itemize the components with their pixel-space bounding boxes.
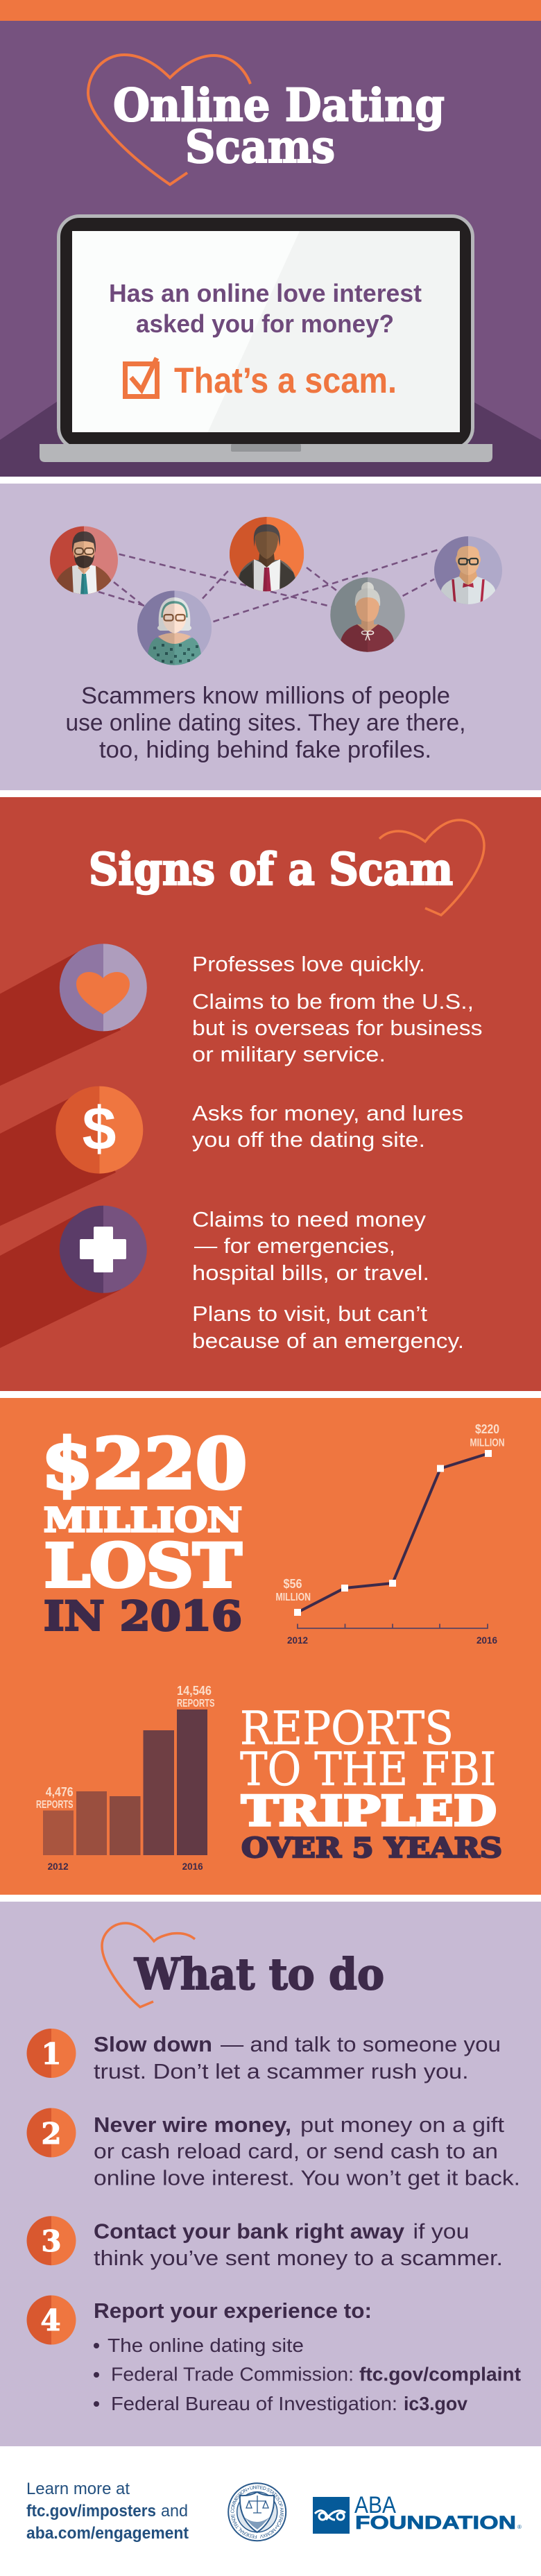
top orange band [0, 0, 541, 21]
title [113, 79, 445, 173]
signs text: love and overseas: or military service. [192, 1042, 386, 1066]
headline: $220 million lost in 2016 [42, 1424, 247, 1640]
bar chart: FBI reports: REPORTS [36, 1799, 74, 1811]
step 3 text: think you’ve sent money to a scammer. [94, 2246, 503, 2270]
icon: avatar bald man with bow tie [434, 536, 502, 607]
headline: reports tripled: REPORTS [240, 1702, 454, 1755]
network dashed lines [98, 549, 441, 622]
step 4 text: ftc.gov/complaint [359, 2364, 521, 2385]
step 1 text: trust. Don’t let a scammer rush you. [94, 2059, 469, 2083]
signs text: emergencies and visit: because of an emergency. [192, 1329, 464, 1353]
number badge 2 [26, 2108, 76, 2158]
signs text: money and lure: Asks for money, and lures [192, 1101, 463, 1125]
profiles text block [65, 683, 466, 763]
heading: signs of a scam: Signs of a Scam [89, 844, 453, 896]
signs text: money and lure: you off the dating site. [192, 1127, 425, 1152]
icon: avatar woman with headband [137, 590, 212, 666]
icon: avatar bearded man [50, 526, 118, 597]
screen answer text: That’s a scam. [174, 361, 397, 401]
bar chart: FBI reports: 2016 [182, 1861, 203, 1872]
line chart: dollars lost [276, 1422, 505, 1646]
profiles text block: Scammers know millions of people [81, 683, 450, 709]
title: Online Dating [113, 79, 445, 132]
panel: statistics [0, 1398, 541, 1895]
screen question text: Has an online love interest [109, 279, 422, 307]
icon: medical cross badge [59, 1205, 148, 1294]
title: Scams [185, 121, 335, 173]
icon: checkbox [125, 358, 157, 397]
step 2 text: online love interest. You won’t get it back. [94, 2165, 520, 2190]
signs text: love and overseas: Claims to be from the U.S., [192, 989, 474, 1014]
icon: FTC seal: FEDERAL TRADE COMMISSION • UNITED STATES OF AMERICA • MCMXV [230, 2485, 284, 2539]
signs text: emergencies and visit: — for emergencies, [194, 1234, 395, 1258]
headline: $220 million lost in 2016: $220 [42, 1424, 247, 1504]
footer: learn more text: aba.com/engagement [26, 2524, 189, 2543]
screen question text [109, 279, 422, 338]
line chart: dollars lost: 2012 [287, 1635, 308, 1646]
panel: profiles [0, 484, 541, 790]
step 3 text: if you [413, 2219, 469, 2244]
signs text: emergencies and visit: Claims to need money [192, 1207, 427, 1231]
signs text: emergencies and visit [192, 1207, 464, 1353]
signs text: love and overseas [192, 952, 483, 1066]
icon: what-to-do heart outline [102, 1923, 195, 2007]
number badge 3: 3 [41, 2224, 62, 2258]
headline: reports tripled [240, 1702, 502, 1864]
step 1 text [94, 2032, 501, 2083]
line chart: dollars lost: MILLION [470, 1438, 505, 1449]
headline: $220 million lost in 2016: MILLION [44, 1501, 242, 1540]
profiles text block: use online dating sites. They are there, [65, 710, 466, 736]
headline: reports tripled: TRIPLED [241, 1787, 497, 1836]
signs text: money and lure [192, 1101, 463, 1152]
number badge 1: 1 [41, 2037, 62, 2071]
line chart: dollars lost: 2016 [476, 1635, 498, 1646]
bar chart: FBI reports: 14,546 [177, 1684, 212, 1698]
bar chart: FBI reports: REPORTS [177, 1698, 215, 1709]
number badge 1 [26, 2029, 76, 2078]
signs text: love and overseas: Professes love quickly. [192, 952, 425, 976]
number badge 2: 2 [41, 2117, 62, 2151]
line chart: dollars lost: MILLION [276, 1592, 311, 1603]
signs text: emergencies and visit: hospital bills, or travel. [192, 1261, 429, 1285]
step 3 text [94, 2219, 503, 2270]
icon: dollar badge [55, 1086, 144, 1175]
headline: reports tripled: OVER 5 YEARS [241, 1832, 502, 1864]
footer: learn more text: ftc.gov/imposters [26, 2502, 156, 2520]
footer: learn more text: and [161, 2502, 188, 2520]
bar chart: FBI reports: 4,476 [46, 1785, 74, 1799]
icon: heart badge [59, 944, 148, 1032]
signs text: emergencies and visit: Plans to visit, but can’t [192, 1302, 427, 1326]
profiles text block: too, hiding behind fake profiles. [99, 737, 431, 763]
step 2 text [94, 2113, 520, 2190]
step 1 text: — and talk to someone you [221, 2032, 501, 2056]
heading: what to do: What to do [134, 1949, 384, 1999]
screen question text: asked you for money? [136, 309, 394, 338]
line chart: dollars lost: $56 [283, 1577, 302, 1591]
icon: avatar man in suit [230, 517, 304, 593]
icon: laptop [40, 216, 492, 462]
icon: long shadows [0, 952, 121, 1348]
panel: what to do [0, 1902, 541, 2446]
logo: ABA Foundation: ABA [354, 2492, 396, 2518]
step 1 text: Slow down [94, 2032, 212, 2056]
icon: avatar woman with grey bun [330, 577, 405, 652]
step 2 text: put money on a gift [300, 2113, 504, 2137]
logo: ABA Foundation: ® [517, 2524, 522, 2530]
headline: $220 million lost in 2016: LOST [44, 1532, 241, 1601]
step 2 text: Never wire money, [94, 2113, 291, 2137]
footer: learn more text: Learn more at [26, 2480, 130, 2498]
step 4 text: Federal Bureau of Investigation: [111, 2393, 397, 2414]
signs text: love and overseas: but is overseas for business [192, 1016, 483, 1040]
desk shadow [0, 402, 541, 477]
step 4 text: The online dating site [108, 2335, 304, 2356]
step 2 text: or cash reload card, or send cash to an [94, 2139, 498, 2163]
logo: ABA Foundation [313, 2492, 522, 2534]
step 4 text: Federal Trade Commission: [111, 2364, 354, 2385]
footer: learn more text [26, 2480, 189, 2543]
bar chart: FBI reports [36, 1684, 215, 1872]
number badge 3 [26, 2216, 76, 2266]
logo: ABA Foundation: FOUNDATION [355, 2512, 516, 2533]
icon: dollar badge: $ [83, 1094, 116, 1163]
step 4 text [94, 2298, 521, 2414]
number badge 4 [26, 2295, 76, 2345]
panel: signs of a scam [0, 797, 541, 1391]
line chart: dollars lost: $220 [475, 1422, 499, 1436]
step 4 text: ic3.gov [404, 2393, 467, 2414]
headline: reports tripled: TO THE FBI [240, 1743, 496, 1796]
icon: signs heart outline [379, 820, 484, 915]
headline: $220 million lost in 2016: IN 2016 [44, 1593, 242, 1640]
number badge 4: 4 [40, 2303, 61, 2337]
bar chart: FBI reports: 2012 [48, 1861, 69, 1872]
panel: intro header [0, 21, 541, 477]
icon: title heart outline [88, 55, 250, 185]
step 4 text: Report your experience to: [94, 2298, 372, 2323]
step 3 text: Contact your bank right away [94, 2219, 405, 2244]
